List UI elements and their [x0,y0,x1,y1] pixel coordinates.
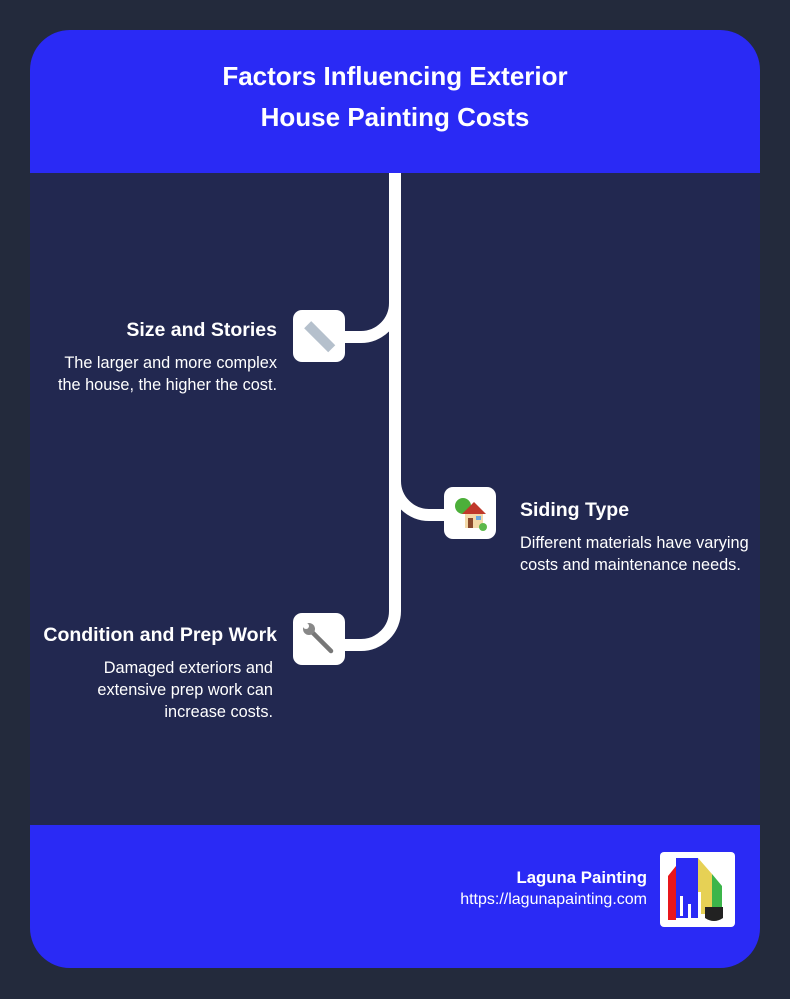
text: condition and prep work: extensive prep work can [97,681,273,699]
text: size and stories: Size and Stories [126,319,277,341]
title [222,61,568,132]
text: siding type: Siding Type [520,499,629,521]
icon: wrench [293,613,345,665]
footer brand text [460,868,647,908]
text: condition and prep work: Condition and Prep Work [43,624,277,646]
footer brand text: https://lagunapainting.com [460,891,647,908]
header band [30,30,760,173]
text: siding type: Different materials have varying [520,534,749,552]
footer brand text: Laguna Painting [516,868,647,887]
logo [660,852,735,927]
text: siding type: costs and maintenance needs. [520,556,741,574]
text: condition and prep work: Damaged exteriors and [104,659,273,677]
text: condition and prep work [43,624,277,721]
text: size and stories [58,319,277,394]
icon: house [444,487,496,539]
title: House Painting Costs [261,102,529,132]
text: size and stories: the house, the higher the cost. [58,376,277,394]
text: condition and prep work: increase costs. [164,703,273,721]
footer band [30,825,760,968]
text: siding type [520,499,749,574]
text: size and stories: The larger and more complex [64,354,277,372]
icon: ruler [293,310,345,362]
title: Factors Influencing Exterior [222,61,568,91]
